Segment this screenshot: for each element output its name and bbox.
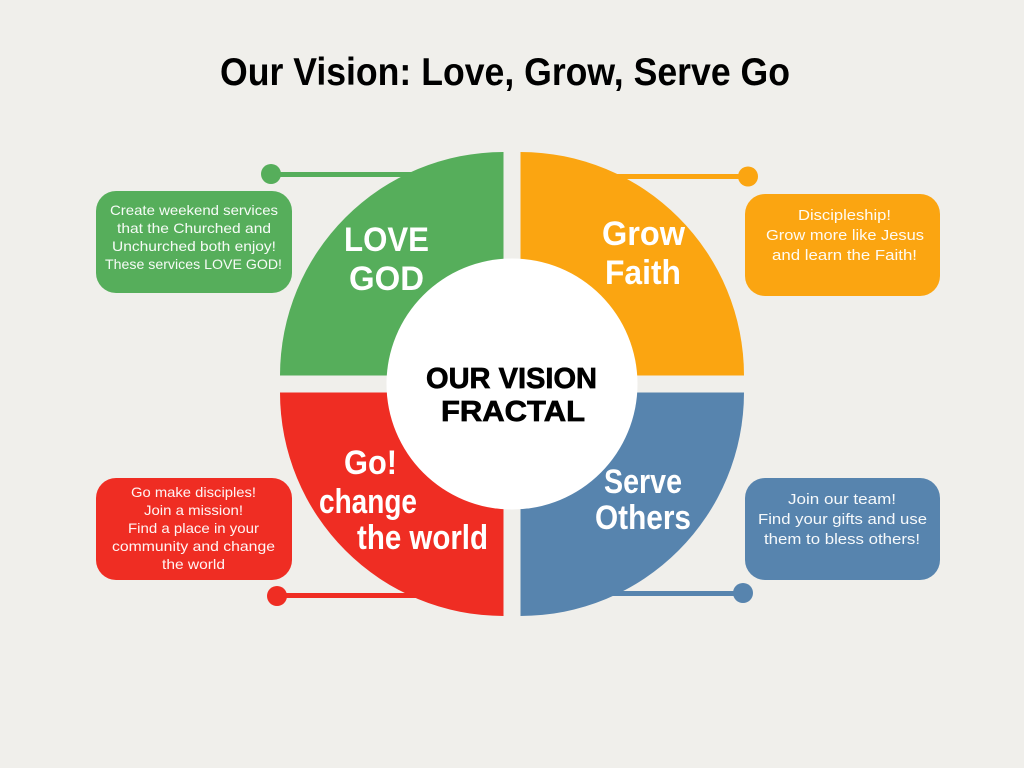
callout: love: Create weekend services — [110, 202, 278, 218]
callout: grow: Grow more like Jesus — [766, 227, 924, 244]
callout: grow: Discipleship! — [798, 207, 891, 224]
callout: go: Go make disciples! — [131, 484, 256, 500]
callout: serve: Find your gifts and use — [758, 511, 927, 528]
heading: love god — [344, 221, 429, 298]
connector: love — [261, 164, 425, 184]
panel: serve others — [520, 392, 940, 616]
heading: serve others: Others — [595, 499, 691, 537]
connector: serve — [600, 583, 753, 603]
callout: love — [96, 191, 292, 293]
heading: love god: LOVE — [344, 221, 429, 259]
heading: serve others — [595, 463, 691, 537]
quadrant: go — [280, 392, 504, 616]
quadrant: serve — [520, 392, 744, 616]
panel: love god — [96, 152, 504, 376]
callout: go — [96, 478, 292, 580]
heading: go change the world: the world — [357, 519, 488, 557]
callout: love: Unchurched both enjoy! — [112, 238, 276, 254]
callout: go: community and change — [112, 538, 275, 554]
quadrant: grow — [520, 152, 744, 376]
callout: serve: Join our team! — [788, 491, 896, 508]
connector: grow — [605, 166, 758, 186]
connector: go — [267, 586, 430, 606]
callout: grow — [745, 194, 940, 296]
heading: go change the world: change — [319, 483, 417, 521]
callout: go: the world — [162, 556, 225, 572]
heading: go change the world: Go! — [344, 444, 397, 482]
center circle: OUR VISION — [426, 363, 597, 395]
title: Our Vision: Love, Grow, Serve Go — [220, 51, 790, 94]
panel: go change the world — [96, 392, 504, 616]
center circle: FRACTAL — [441, 396, 585, 428]
callout: love: These services LOVE GOD! — [105, 256, 282, 272]
heading: serve others: Serve — [604, 463, 682, 501]
callout: love: that the Churched and — [117, 220, 271, 236]
panel: grow faith — [520, 152, 940, 376]
heading: love god: GOD — [349, 260, 424, 298]
callout: serve — [745, 478, 940, 580]
heading: grow faith: Grow — [602, 215, 686, 253]
callout: grow: and learn the Faith! — [772, 247, 917, 264]
quadrant: love — [280, 152, 504, 376]
center circle — [386, 258, 638, 510]
callout: go: Find a place in your — [128, 520, 259, 536]
heading: go change the world — [319, 444, 488, 557]
callout: go: Join a mission! — [144, 502, 243, 518]
heading: grow faith: Faith — [605, 254, 681, 292]
heading: grow faith — [602, 215, 686, 292]
callout: serve: them to bless others! — [764, 531, 920, 548]
